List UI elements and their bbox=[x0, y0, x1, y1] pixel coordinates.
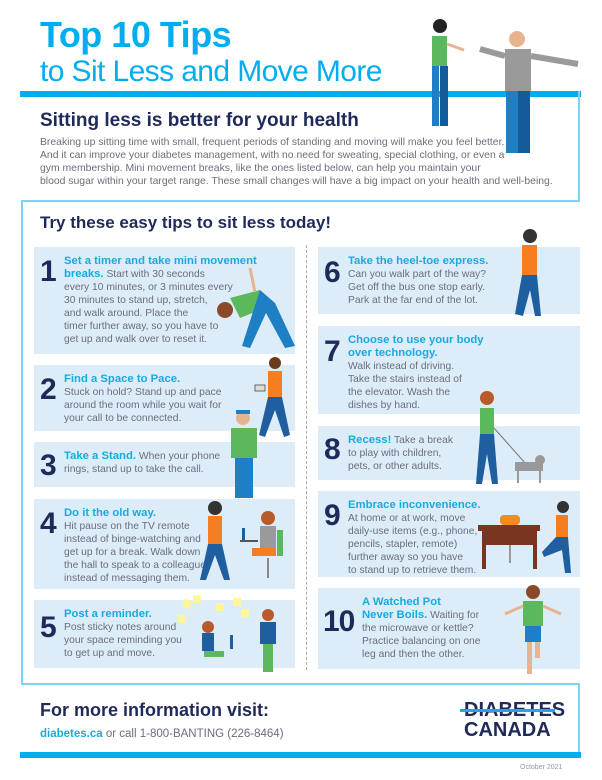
tip 6: Park at the far end of the lot. bbox=[348, 295, 478, 306]
title: Top 10 Tips bbox=[40, 14, 231, 55]
footer text bbox=[40, 700, 284, 740]
tip 4: 4 bbox=[40, 507, 56, 540]
footer text: diabetes.ca or call 1-800-BANTING (226-8464) bbox=[40, 728, 284, 740]
tip 9: daily-use items (e.g., phone, bbox=[348, 526, 477, 537]
tip 8: to play with children, bbox=[348, 448, 441, 459]
tip 5 bbox=[34, 600, 295, 668]
tip 9: further away so you have bbox=[348, 552, 463, 563]
tip 8 bbox=[318, 426, 580, 480]
intro paragraph bbox=[40, 137, 553, 187]
tip 1: 1 bbox=[40, 255, 56, 288]
tip 6: 6 bbox=[324, 256, 340, 289]
intro paragraph: Breaking up sitting time with small, frequent periods of standing and moving will make you feel better. bbox=[40, 137, 504, 148]
tip 7: 7 bbox=[324, 335, 340, 368]
tip 10: 10 bbox=[323, 605, 354, 638]
icon: man on phone bbox=[231, 410, 257, 498]
tip 5: Post a reminder. bbox=[64, 608, 152, 620]
tip 7: over technology. bbox=[348, 347, 438, 359]
tips panel frame bbox=[21, 200, 580, 685]
title: to Sit Less and Move More bbox=[40, 55, 382, 88]
tip 1: 30 minutes to stand up, stretch, bbox=[64, 295, 208, 306]
icon: office colleagues bbox=[200, 501, 283, 580]
tip 9 bbox=[318, 491, 580, 577]
tip 4: instead of messaging them. bbox=[64, 573, 190, 584]
tip 1: timer further away, so you have to bbox=[64, 321, 218, 332]
tip 8: Recess! Take a break bbox=[348, 434, 453, 446]
tip 10: the microwave or kettle? bbox=[362, 623, 474, 634]
tip 9: pencils, stapler, remote) bbox=[348, 539, 457, 550]
logo: Diabetes Canada: DIABETES bbox=[464, 699, 565, 721]
tip 1: every 10 minutes, or 3 minutes every bbox=[64, 282, 233, 293]
tip 5: Post sticky notes around bbox=[64, 622, 176, 633]
tip 8: 8 bbox=[324, 433, 340, 466]
tip 1: Set a timer and take mini movement breaks. Start with 30 seconds bbox=[64, 255, 257, 280]
tip 2 bbox=[34, 365, 295, 431]
tip 1 bbox=[34, 247, 295, 354]
intro paragraph: gym membership. Mini movement breaks, like the ones listed below, can help you maintain your bbox=[40, 163, 481, 174]
intro heading: Sitting less is better for your health bbox=[40, 110, 359, 131]
tip 4: Hit pause on the TV remote bbox=[64, 521, 190, 532]
tip 3: Take a Stand. When your phone bbox=[64, 450, 220, 462]
icon: woman walking dog bbox=[476, 391, 545, 484]
illustration: two people bbox=[432, 19, 578, 153]
tip 4 bbox=[34, 499, 295, 589]
title bbox=[40, 14, 382, 88]
tip 2: your call to be connected. bbox=[64, 413, 181, 424]
tip 9: Embrace inconvenience. bbox=[348, 499, 480, 511]
tip 4: instead of binge-watching and bbox=[64, 534, 201, 545]
logo: Diabetes Canada: CANADA bbox=[464, 719, 551, 741]
tip 10 bbox=[318, 588, 580, 669]
tip 6: Take the heel-toe express. bbox=[348, 255, 488, 267]
tip 3: rings, stand up to take the call. bbox=[64, 464, 204, 475]
footer frame bbox=[578, 684, 580, 754]
tip 10: Practice balancing on one bbox=[362, 636, 480, 647]
date: October 2021 bbox=[520, 764, 562, 771]
icon: desk and running woman bbox=[478, 501, 571, 573]
tip 1: get up and walk over to reset it. bbox=[64, 334, 207, 345]
tip 10: leg and then the other. bbox=[362, 649, 464, 660]
tip 4: Do it the old way. bbox=[64, 507, 156, 519]
tip 4: the hall to speak to a colleague bbox=[64, 560, 206, 571]
tip 2: around the room while you wait for bbox=[64, 400, 221, 411]
tip 3: 3 bbox=[40, 449, 56, 482]
icon: sticky notes and people bbox=[178, 595, 276, 672]
tip 7: Choose to use your body bbox=[348, 334, 484, 346]
tip 4: get up for a break. Walk down bbox=[64, 547, 200, 558]
tip 10: Never Boils. Waiting for bbox=[362, 609, 479, 621]
footer text: For more information visit: bbox=[40, 700, 269, 720]
intro paragraph: And it can improve your diabetes management, with no need for sweating, special clothing, or even a bbox=[40, 150, 504, 161]
tip 7: Walk instead of driving. bbox=[348, 361, 454, 372]
tip 3 bbox=[34, 442, 295, 487]
tip 9: 9 bbox=[324, 499, 340, 532]
tip 6: Can you walk part of the way? bbox=[348, 269, 486, 280]
tip 5: 5 bbox=[40, 611, 56, 644]
divider bbox=[306, 245, 307, 670]
intro paragraph: blood sugar within your target range. These small changes will have a big impact on your health and well-being. bbox=[40, 176, 553, 187]
tips heading: Try these easy tips to sit less today! bbox=[40, 213, 331, 232]
footer bar bbox=[20, 752, 581, 758]
tip 6: Get off the bus one stop early. bbox=[348, 282, 485, 293]
icon: pacing man bbox=[254, 357, 290, 437]
tip 9: At home or at work, move bbox=[348, 513, 465, 524]
tip 5: your space reminding you bbox=[64, 635, 182, 646]
tip 2: Find a Space to Pace. bbox=[64, 373, 180, 385]
tip 9: to stand up to retrieve them. bbox=[348, 565, 476, 576]
logo: Diabetes Canada bbox=[460, 699, 565, 741]
tip 7 bbox=[318, 326, 580, 414]
tip 5: to get up and move. bbox=[64, 648, 155, 659]
tip 7: Take the stairs instead of bbox=[348, 374, 462, 385]
tip 7: dishes by hand. bbox=[348, 400, 420, 411]
icon: balancing woman bbox=[504, 585, 562, 674]
tip 2: 2 bbox=[40, 373, 56, 406]
icon: walking woman bbox=[515, 229, 541, 316]
tip 2: Stuck on hold? Stand up and pace bbox=[64, 387, 221, 398]
tip 10: A Watched Pot bbox=[362, 596, 441, 608]
tip 6 bbox=[318, 247, 580, 314]
header bar bbox=[20, 91, 581, 97]
tip 7: the elevator. Wash the bbox=[348, 387, 450, 398]
icon: stretching woman bbox=[217, 268, 295, 348]
tip 8: pets, or other adults. bbox=[348, 461, 442, 472]
tip 1: and walk around. Place the bbox=[64, 308, 188, 319]
